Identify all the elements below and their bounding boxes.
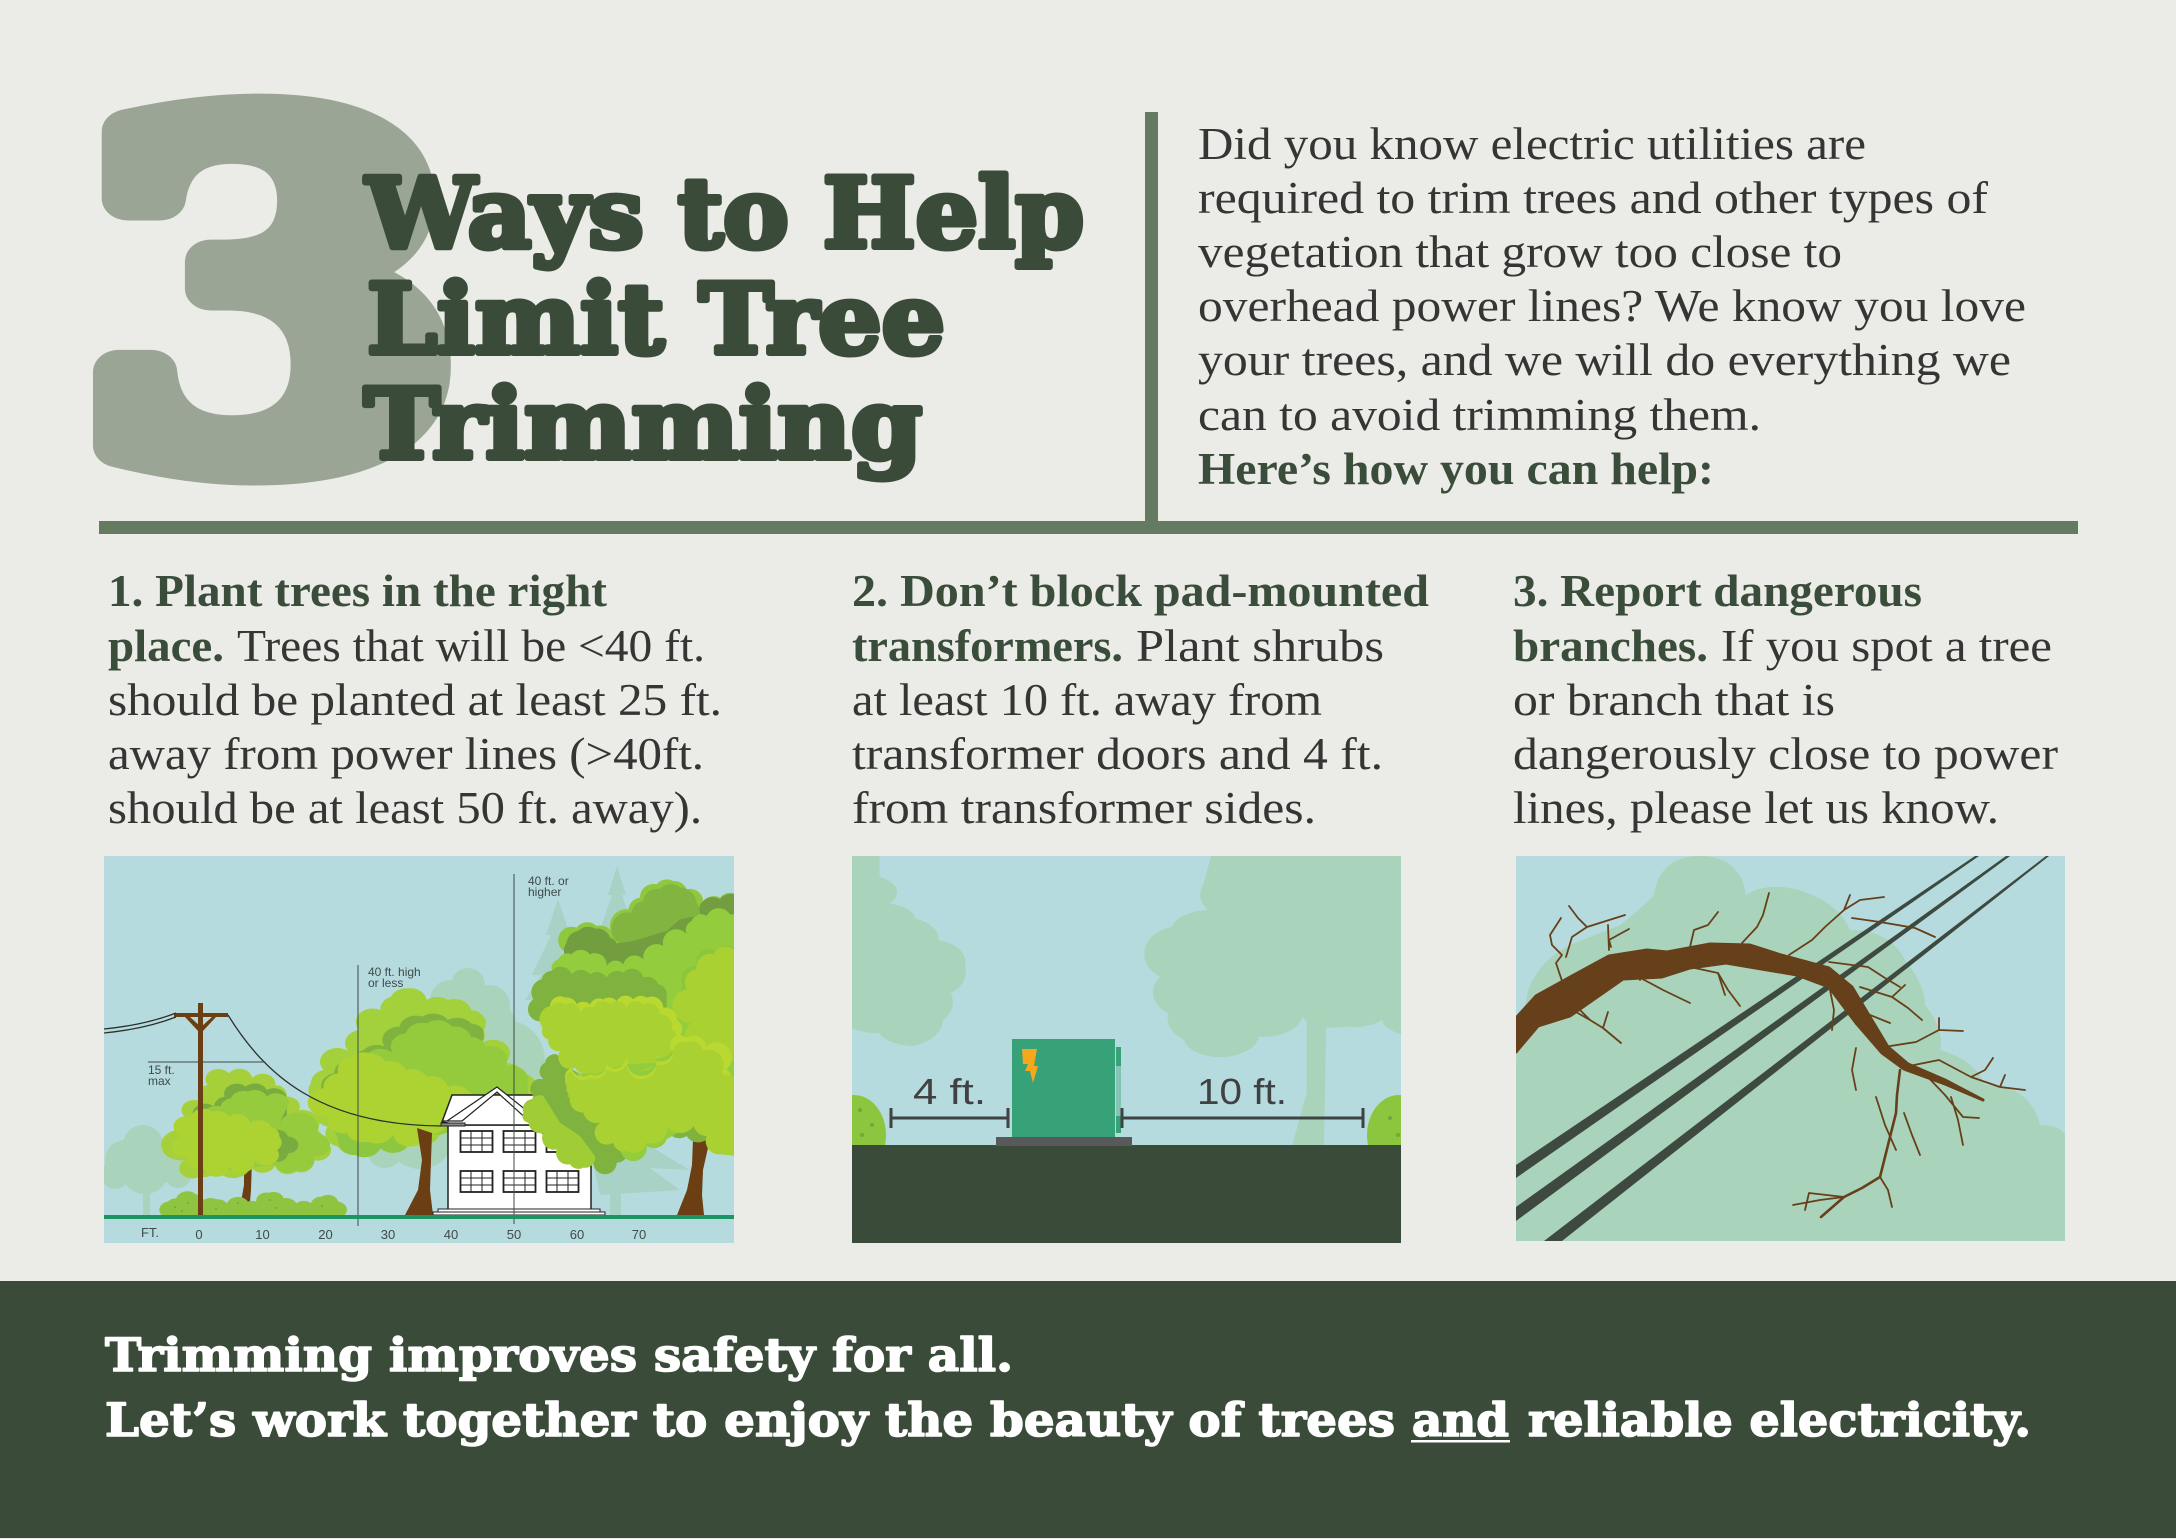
distance axis	[142, 1228, 646, 1239]
step 1 text: should be planted at least 25 ft.	[108, 675, 722, 725]
step 2 text: transformers.	[852, 621, 1123, 671]
step 1 text	[108, 566, 722, 833]
house	[433, 1087, 605, 1215]
footer line 2: Let’s work together to enjoy the beauty of trees	[105, 1393, 1395, 1447]
step 1 text: 1. Plant trees in the right	[108, 566, 607, 616]
step 2 text: at least 10 ft. away from	[852, 675, 1322, 725]
step 1 text: Trees that will be <40 ft.	[237, 621, 705, 671]
distance axis: FT.	[141, 1225, 159, 1240]
distance axis: 10	[255, 1227, 270, 1242]
faint trees	[848, 853, 1405, 1145]
dimension: 10 ft: 10 ft.	[1197, 1071, 1287, 1112]
ground	[852, 1145, 1401, 1243]
title: Ways to Help	[365, 157, 1084, 270]
step 1 text: away from power lines (>40ft.	[108, 729, 704, 779]
medium tree	[308, 988, 536, 1215]
panel: tree planting distance illustration	[101, 856, 737, 1243]
intro text: Here’s how you can help:	[1198, 444, 1714, 494]
step 1 text: place.	[108, 621, 224, 671]
title: Limit Tree	[367, 263, 945, 376]
shrubs	[852, 1095, 1401, 1145]
footer band	[0, 1281, 2176, 1538]
footer line 2: reliable electricity.	[1528, 1393, 2031, 1447]
step 3 text: If you spot a tree	[1721, 621, 2052, 671]
ground line	[104, 1215, 734, 1219]
power lines	[1516, 856, 2049, 1241]
shrubs	[159, 1191, 347, 1217]
height labels: max	[148, 1074, 171, 1088]
step 3 text: lines, please let us know.	[1513, 783, 1999, 833]
faint background trees	[101, 866, 690, 1215]
step 3 text: 3. Report dangerous	[1513, 566, 1922, 616]
branch	[1516, 893, 2025, 1217]
intro text	[1198, 119, 2026, 494]
transformer	[996, 1039, 1132, 1146]
horizontal divider	[99, 521, 2078, 534]
intro text: required to trim trees and other types of	[1198, 173, 1988, 223]
step 2 text: Plant shrubs	[1136, 621, 1384, 671]
title: Trimming	[364, 368, 922, 481]
title	[364, 157, 1084, 481]
distance axis: 30	[381, 1227, 395, 1242]
big numeral 3: 3	[81, 25, 460, 566]
step 2 text: from transformer sides.	[852, 783, 1316, 833]
dimension: 4 ft: 4 ft.	[913, 1071, 986, 1112]
intro text: vegetation that grow too close to	[1198, 227, 1842, 277]
small tree	[161, 1069, 331, 1202]
utility pole	[174, 1003, 228, 1215]
distance axis: 20	[318, 1227, 333, 1242]
distance axis: 60	[570, 1227, 584, 1242]
footer line 2	[105, 1393, 2031, 1447]
large tree	[522, 879, 737, 1215]
step 2 text: 2. Don’t block pad-mounted	[852, 566, 1429, 616]
height labels: 40 ft. or	[528, 874, 569, 888]
height labels: or less	[368, 976, 403, 990]
intro text: Did you know electric utilities are	[1198, 119, 1866, 169]
panel: transformer clearance illustration	[852, 856, 1401, 1243]
height labels	[148, 874, 569, 1088]
step 2 text	[852, 566, 1429, 833]
step 3 text: branches.	[1513, 621, 1708, 671]
height lines	[148, 874, 514, 1226]
step 3 text: or branch that is	[1513, 675, 1835, 725]
footer line 1: Trimming improves safety for all.	[105, 1328, 1013, 1382]
dimension: 10 ft	[1120, 1078, 1364, 1128]
distance axis: 0	[195, 1227, 203, 1242]
power lines	[104, 1013, 441, 1126]
icon: lightning bolt	[1022, 1049, 1038, 1083]
footer line 2: and	[1412, 1393, 1509, 1447]
height labels: higher	[528, 885, 561, 899]
intro text: overhead power lines? We know you love	[1198, 281, 2026, 331]
distance axis: 40	[444, 1227, 458, 1242]
height labels: 15 ft.	[148, 1063, 175, 1077]
step 1 text: should be at least 50 ft. away).	[108, 783, 702, 833]
intro text: your trees, and we will do everything we	[1198, 335, 2011, 385]
distance axis: 70	[632, 1227, 646, 1242]
panel: dangerous branch illustration	[1516, 856, 2065, 1241]
distance axis: 50	[507, 1227, 521, 1242]
vertical divider	[1145, 112, 1158, 524]
height labels: 40 ft. high	[368, 965, 421, 979]
dimension: 4 ft	[890, 1078, 1010, 1128]
step 3 text: dangerously close to power	[1513, 729, 2058, 779]
step 3 text	[1513, 566, 2058, 833]
faint tree	[1516, 856, 2065, 1241]
step 2 text: transformer doors and 4 ft.	[852, 729, 1383, 779]
intro text: can to avoid trimming them.	[1198, 390, 1761, 440]
